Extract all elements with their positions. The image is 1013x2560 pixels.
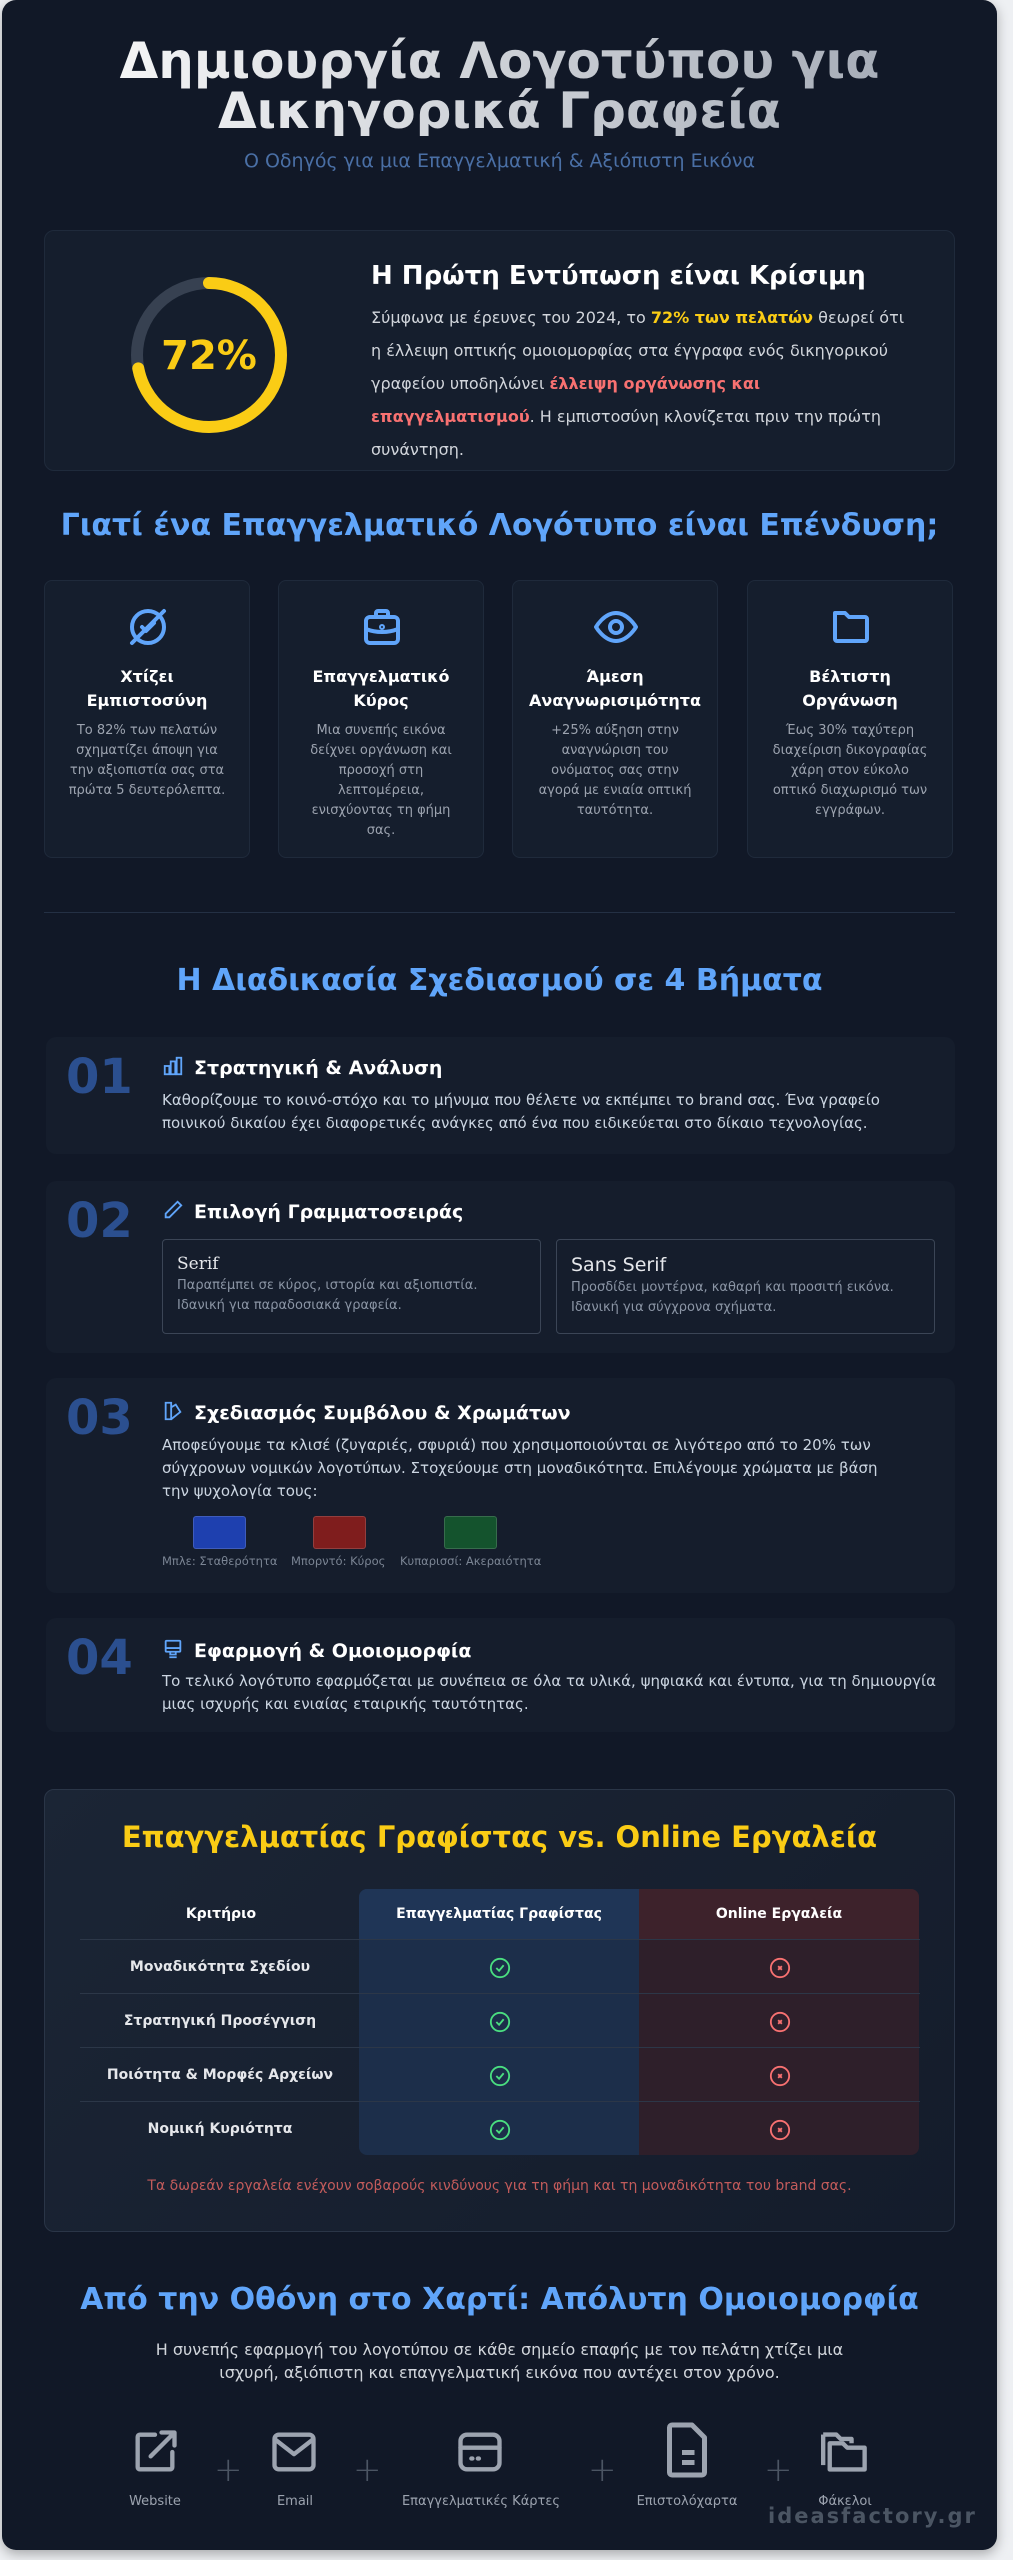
panel: builds trust: Εμπιστοσύνη xyxy=(87,691,207,710)
heading: Η Πρώτη Εντύπωση είναι Κρίσιμη xyxy=(371,261,866,291)
title: Δικηγορικά Γραφεία xyxy=(218,82,781,140)
sans serif box: Προσδίδει μοντέρνα, καθαρή και προσιτή εικόνα. xyxy=(571,1280,894,1295)
heading: Επαγγελματίας Γραφίστας vs. Online Εργαλεία xyxy=(122,1820,877,1854)
heading: why investment: Γιατί ένα Επαγγελματικό Λογότυπο είναι Επένδυση; xyxy=(61,508,938,543)
icon: eye xyxy=(594,611,638,643)
text: Επαγγελματικές Κάρτες xyxy=(402,2494,560,2509)
panel: step 2 xyxy=(46,1181,955,1353)
text: + xyxy=(353,2450,382,2490)
serif box xyxy=(162,1239,541,1334)
panel: prestige: Μια συνεπής εικόνα δείχνει οργάνωση και προσοχή στη λεπτομέρεια, ενισχύοντας τη φήμη σας. xyxy=(310,723,452,838)
panel: step 1 xyxy=(46,1037,955,1154)
panel: step 3: Μπορντό: Κύρος xyxy=(291,1554,385,1568)
table: Online Εργαλεία xyxy=(716,1906,842,1922)
text: Email xyxy=(277,2494,313,2509)
footer note: Τα δωρεάν εργαλεία ενέχουν σοβαρούς κινδύνους για τη φήμη και τη μοναδικότητα του brand σας. xyxy=(147,2178,852,2194)
panel: organization: Οργάνωση xyxy=(802,691,898,710)
panel: builds trust: Το 82% των πελατών σχηματίζει άποψη για την αξιοπιστία σας στα πρώτα 5 δευτερόλεπτα. xyxy=(69,723,225,798)
icon: letterhead xyxy=(667,2422,707,2478)
panel: step 1: 01 xyxy=(66,1049,133,1105)
watermark: ideasfactory.gr xyxy=(768,2504,977,2528)
serif box: Ιδανική για παραδοσιακά γραφεία. xyxy=(177,1298,402,1313)
panel: step 3 xyxy=(46,1378,955,1593)
step title: Επιλογή Γραμματοσειράς xyxy=(194,1201,463,1223)
sans serif box: Ιδανική για σύγχρονα σχήματα. xyxy=(571,1300,776,1315)
panel: prestige xyxy=(278,580,484,858)
text: Φάκελοι xyxy=(818,2494,872,2509)
text: + xyxy=(764,2450,792,2490)
text block: Σύμφωνα με έρευνες του 2024, το 72% των πελατών θεωρεί ότι η έλλειψη οπτικής ομοιομορφίας στα έγγραφα ενός δικηγορικού γραφείου υποδηλώνει έλλειψη οργάνωσης και επαγγελματισμού. Η εμπιστοσύνη κλονίζεται πριν την πρώτη συνάντηση. xyxy=(371,308,904,459)
step title: Στρατηγική & Ανάλυση xyxy=(194,1057,442,1079)
table: Επαγγελματίας Γραφίστας xyxy=(396,1906,602,1922)
panel: step 4: 04 xyxy=(66,1630,133,1686)
text: Website xyxy=(129,2494,181,2509)
table rows: Στρατηγική Προσέγγιση xyxy=(124,2013,316,2029)
color swatches xyxy=(193,1516,246,1549)
panel: first impression stat xyxy=(44,230,955,471)
title: Δημιουργία Λογοτύπου για xyxy=(120,32,879,90)
panel: organization xyxy=(747,580,953,858)
sans serif box: Sans Serif xyxy=(571,1254,666,1276)
panel: prestige: Επαγγελματικό xyxy=(312,667,449,686)
icon: folders xyxy=(821,2432,867,2472)
panel: step 4 xyxy=(46,1618,955,1732)
heading: screen to paper: Από την Οθόνη στο Χαρτί: Απόλυτη Ομοιομορφία xyxy=(80,2282,919,2317)
text: + xyxy=(588,2450,616,2490)
table rows: Μοναδικότητα Σχεδίου xyxy=(130,1959,310,1975)
panel: step 3: Μπλε: Σταθερότητα xyxy=(162,1554,277,1568)
panel: organization: Έως 30% ταχύτερη διαχείριση δικογραφίας χάρη στον εύκολο οπτικό διαχωρισμό των εγγράφων. xyxy=(773,723,927,818)
panel: recognition: Άμεση xyxy=(586,667,644,686)
panel: step 3: Αποφεύγουμε τα κλισέ (ζυγαριές, σφυριά) που χρησιμοποιούνται σε λιγότερο από το 20% των σύγχρονων νομικών λογοτύπων. Στοχεύουμε στη μοναδικότητα. Επιλέγουμε χρώματα με βάση την ψυχολογία τους: xyxy=(162,1436,878,1500)
icon: briefcase xyxy=(364,609,400,645)
panel: step 3: 03 xyxy=(66,1390,133,1446)
chart: 72% ring: 72% xyxy=(161,333,257,379)
text: + xyxy=(214,2450,242,2490)
panel: comparison xyxy=(44,1789,955,2232)
panel: step 2: 02 xyxy=(66,1193,133,1249)
step title: Εφαρμογή & Ομοιομορφία xyxy=(194,1640,471,1662)
icon: folder xyxy=(833,611,869,643)
panel: recognition xyxy=(512,580,718,858)
text: Επιστολόχαρτα xyxy=(637,2494,737,2509)
serif box: Serif xyxy=(177,1254,219,1274)
sans serif box xyxy=(556,1239,935,1334)
table: Κριτήριο xyxy=(186,1906,256,1922)
panel: recognition: +25% αύξηση στην αναγνώριση του ονόματος σας στην αγορά με ενιαία οπτική ταυτότητα. xyxy=(539,723,691,818)
text block: Η συνεπής εφαρμογή του λογοτύπου σε κάθε σημείο επαφής με τον πελάτη χτίζει μια ισχυρή, αξιόπιστη και επαγγελματική εικόνα που αντέχει στον χρόνο. xyxy=(156,2340,843,2382)
icon: badge check xyxy=(130,608,166,646)
step title: Σχεδιασμός Συμβόλου & Χρωμάτων xyxy=(194,1402,571,1424)
panel: organization: Βέλτιστη xyxy=(809,667,891,686)
panel: recognition: Αναγνωρισιμότητα xyxy=(529,691,701,710)
panel: builds trust xyxy=(44,580,250,858)
table xyxy=(186,1889,919,2155)
table rows: Ποιότητα & Μορφές Αρχείων xyxy=(107,2067,333,2083)
icon: business cards xyxy=(458,2432,502,2472)
title xyxy=(2,36,997,136)
icon: website xyxy=(136,2430,177,2472)
icon: email xyxy=(272,2432,316,2472)
panel: builds trust: Χτίζει xyxy=(120,667,174,686)
panel: step 4: Το τελικό λογότυπο εφαρμόζεται με συνέπεια σε όλα τα υλικά, ψηφιακά και έντυπα, για τη δημιουργία μιας ισχυρής και ενιαίας εταιρικής ταυτότητας. xyxy=(162,1672,936,1713)
heading: process: Η Διαδικασία Σχεδιασμού σε 4 Βήματα xyxy=(176,963,823,998)
serif box: Παραπέμπει σε κύρος, ιστορία και αξιοπιστία. xyxy=(177,1278,477,1293)
panel: step 1: Καθορίζουμε το κοινό-στόχο και το μήνυμα που θέλετε να εκπέμπει το brand σας. Ένα γραφείο ποινικού δικαίου έχει διαφορετικές ανάγκες από ένα που ειδικεύεται στο δίκαιο τεχνολογίας. xyxy=(162,1091,880,1132)
panel: prestige: Κύρος xyxy=(353,691,409,710)
subtitle: Ο Οδηγός για μια Επαγγελματική & Αξιόπιστη Εικόνα xyxy=(244,150,755,172)
table rows: Νομική Κυριότητα xyxy=(148,2121,292,2137)
chart: 72% ring xyxy=(131,277,287,433)
panel: step 3: Κυπαρισσί: Ακεραιότητα xyxy=(400,1554,541,1568)
